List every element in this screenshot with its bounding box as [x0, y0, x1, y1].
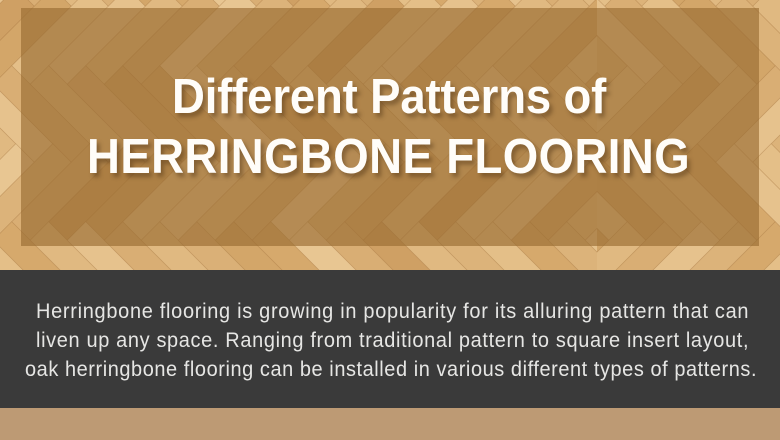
- wood parquet background: [0, 0, 780, 270]
- tan footer band: [0, 408, 780, 440]
- title: [87, 70, 690, 184]
- intro band: [0, 270, 780, 408]
- translucent title panel: [21, 8, 759, 246]
- title line 2: HERRINGBONE FLOORING: [87, 130, 690, 184]
- intro line 2: liven up any space. Ranging from traditional pattern to square insert layout,: [36, 329, 749, 352]
- title line 1: Different Patterns of: [172, 70, 607, 124]
- intro text: [25, 300, 757, 381]
- intro line 3: oak herringbone flooring can be installed in various different types of patterns.: [25, 358, 757, 381]
- intro line 1: Herringbone flooring is growing in popularity for its alluring pattern that can: [36, 300, 749, 323]
